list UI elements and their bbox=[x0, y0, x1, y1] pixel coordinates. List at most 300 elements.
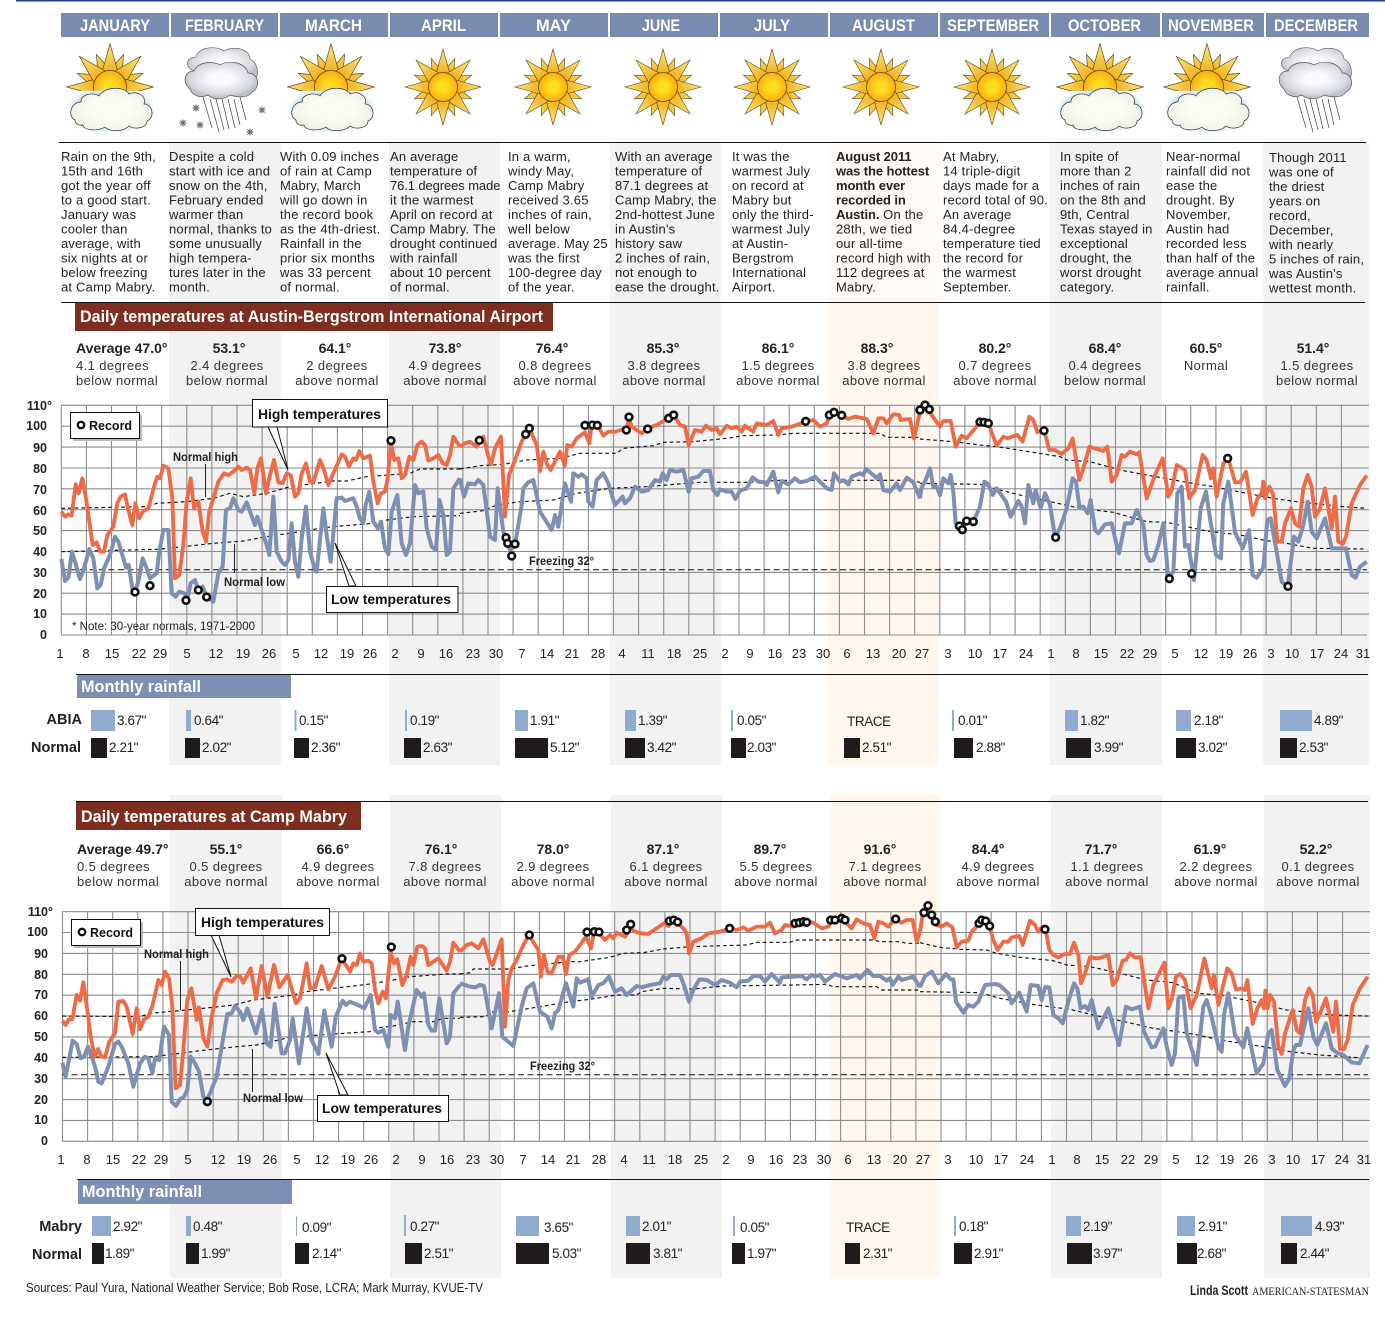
rainfall: ABIA bbox=[31, 675, 1344, 758]
rainfall: Mabry: 2.44" bbox=[1300, 1246, 1330, 1261]
x axis labels: 14 bbox=[540, 646, 554, 661]
April text: about 10 percent bbox=[390, 265, 491, 280]
x axis labels: 14 bbox=[541, 1152, 555, 1167]
month headers: DECEMBER bbox=[1274, 16, 1358, 35]
monthly averages: 0.8 degrees bbox=[518, 358, 592, 373]
June text: temperature of bbox=[615, 164, 703, 178]
x axis labels: 12 bbox=[1195, 1152, 1209, 1167]
June text: Camp Mabry, the bbox=[615, 192, 717, 208]
x axis labels: 16 bbox=[768, 646, 782, 661]
x axis labels: 16 bbox=[440, 1152, 454, 1167]
x axis labels: 9 bbox=[746, 646, 754, 661]
x axis labels: 23 bbox=[466, 1152, 480, 1167]
rainfall: Mabry: 2.14" bbox=[312, 1246, 342, 1261]
x axis labels: 10 bbox=[1285, 646, 1299, 661]
monthly averages: 84.4° bbox=[972, 841, 1004, 857]
icon: August sun bbox=[843, 49, 919, 125]
monthly averages: Average 49.7° bbox=[77, 841, 168, 857]
December text: years on bbox=[1269, 194, 1320, 208]
monthly averages: above normal bbox=[842, 373, 926, 388]
November text: November, bbox=[1166, 207, 1231, 222]
x axis labels: 28 bbox=[591, 646, 605, 661]
rainfall: ABIA: 3.02" bbox=[1198, 740, 1228, 755]
rainfall: ABIA: TRACE bbox=[847, 714, 891, 729]
December text: 5 inches of rain, bbox=[1269, 252, 1364, 266]
x axis labels: 24 bbox=[1334, 646, 1348, 661]
monthly averages: 1.1 degrees bbox=[1070, 859, 1144, 874]
December text: was one of bbox=[1268, 164, 1334, 180]
icon: June sun bbox=[625, 49, 701, 125]
x axis labels: 8 bbox=[1073, 1152, 1081, 1167]
January text: six nights at or bbox=[61, 250, 148, 266]
monthly averages: above normal bbox=[956, 874, 1040, 889]
monthly averages: below normal bbox=[186, 373, 268, 388]
y axis labels: 110° bbox=[27, 399, 52, 413]
rainfall: Mabry: 3.97" bbox=[1093, 1246, 1123, 1261]
x axis labels: 17 bbox=[1310, 646, 1324, 661]
label: normal high: Normal high bbox=[173, 452, 238, 464]
month shading bands bbox=[169, 143, 1370, 1278]
August text: recorded in bbox=[836, 192, 906, 208]
y axis labels: 10 bbox=[33, 607, 47, 621]
x axis labels: 25 bbox=[693, 646, 707, 661]
June text: not enough to bbox=[615, 265, 697, 280]
x axis labels: 6 bbox=[843, 646, 851, 661]
monthly averages: 85.3° bbox=[647, 340, 679, 356]
rainfall: ABIA: 5.12" bbox=[550, 740, 580, 755]
monthly averages: 68.4° bbox=[1089, 340, 1121, 356]
month headers: SEPTEMBER bbox=[947, 16, 1039, 35]
June text: 2nd-hottest June bbox=[615, 207, 715, 222]
y axis labels: 0 bbox=[41, 1134, 48, 1148]
label: freezing: Freezing 32° bbox=[530, 1061, 595, 1073]
rainfall: Mabry: 1.97" bbox=[747, 1246, 777, 1261]
January text: January was bbox=[61, 207, 136, 222]
monthly averages: below normal bbox=[1064, 373, 1146, 388]
monthly averages: above normal bbox=[734, 874, 818, 889]
x axis labels: 19 bbox=[341, 1152, 355, 1167]
February text: some unusually bbox=[169, 236, 262, 251]
May text: average. May 25 bbox=[508, 236, 608, 251]
monthly averages: 80.2° bbox=[979, 340, 1011, 356]
callout: low temperatures: Low temperatures bbox=[322, 1101, 442, 1116]
monthly averages: 2.2 degrees bbox=[1179, 859, 1253, 874]
monthly averages: above normal bbox=[843, 874, 927, 889]
x axis labels: 12 bbox=[209, 646, 223, 661]
monthly averages: Normal bbox=[1184, 358, 1228, 373]
monthly averages: 78.0° bbox=[537, 841, 569, 857]
month headers: MARCH bbox=[305, 16, 362, 35]
x axis labels: 17 bbox=[994, 1152, 1008, 1167]
x axis labels: 3 bbox=[1268, 1152, 1276, 1167]
November text: recorded less bbox=[1166, 236, 1247, 251]
icon: July sun bbox=[734, 49, 810, 125]
icon: February snow cloud bbox=[180, 48, 266, 136]
label: normal low bbox=[243, 1049, 303, 1105]
monthly averages: 73.8° bbox=[429, 340, 461, 356]
February text: snow on the 4th, bbox=[169, 178, 268, 193]
x axis labels: 3 bbox=[944, 646, 952, 661]
rainfall: Mabry: 2.19" bbox=[1083, 1219, 1113, 1234]
y axis labels: 40 bbox=[34, 1051, 48, 1065]
July text: International bbox=[732, 265, 806, 280]
monthly averages: 61.9° bbox=[1194, 841, 1226, 857]
x axis labels: 24 bbox=[1019, 646, 1033, 661]
monthly averages: above normal bbox=[1276, 874, 1360, 889]
monthly averages: 76.4° bbox=[536, 340, 568, 356]
month headers: JULY bbox=[754, 16, 791, 35]
monthly averages: 3.8 degrees bbox=[847, 358, 921, 373]
April text: with rainfall bbox=[389, 250, 458, 266]
monthly averages: 7.8 degrees bbox=[408, 859, 482, 874]
May text: well below bbox=[507, 222, 570, 236]
monthly averages: 0.4 degrees bbox=[1068, 358, 1142, 373]
heading: monthly rainfall: Monthly rainfall bbox=[81, 677, 201, 696]
x axis labels: 24 bbox=[1020, 1152, 1034, 1167]
monthly averages: 87.1° bbox=[647, 841, 679, 857]
series middle third bbox=[460, 915, 920, 1046]
September text: the warmest bbox=[943, 265, 1016, 280]
x axis labels: 16 bbox=[439, 646, 453, 661]
August text: record high with bbox=[836, 250, 931, 266]
x axis labels: 29 bbox=[1144, 1152, 1158, 1167]
heading: Austin-Bergstrom bbox=[75, 303, 553, 331]
label: normal low: Normal low bbox=[224, 577, 285, 589]
June text: 87.1 degrees at bbox=[615, 178, 709, 193]
y axis labels: 30 bbox=[33, 566, 47, 580]
y axis labels: 90 bbox=[34, 947, 48, 961]
July text: Bergstrom bbox=[732, 250, 794, 266]
monthly averages: 89.7° bbox=[754, 841, 786, 857]
February text: Despite a cold bbox=[169, 149, 254, 164]
x axis labels: 29 bbox=[154, 1152, 168, 1167]
rainfall: Mabry: 0.18" bbox=[959, 1219, 989, 1234]
rainfall: Mabry: 0.09" bbox=[302, 1220, 332, 1235]
November text: rainfall did not bbox=[1166, 164, 1250, 178]
December text: record, bbox=[1269, 208, 1311, 223]
December text: with nearly bbox=[1268, 237, 1334, 252]
March text: the record book bbox=[280, 207, 374, 222]
x axis labels: 3 bbox=[1267, 646, 1275, 661]
x axis labels: 23 bbox=[792, 646, 806, 661]
rainfall: ABIA: 0.15" bbox=[299, 713, 329, 728]
January text: at Camp Mabry. bbox=[61, 280, 155, 294]
May text: inches of rain, bbox=[508, 207, 592, 222]
monthly averages: 7.1 degrees bbox=[848, 859, 922, 874]
September text: record total of 90. bbox=[943, 192, 1048, 208]
rainfall: ABIA: 2.02" bbox=[202, 740, 232, 755]
monthly averages: 52.2° bbox=[1300, 841, 1332, 857]
x axis labels: 17 bbox=[993, 646, 1007, 661]
x axis labels: 30 bbox=[490, 1152, 504, 1167]
August text: 112 degrees at bbox=[836, 265, 925, 280]
monthly averages bbox=[76, 340, 1358, 388]
x axis labels: 27 bbox=[916, 1152, 930, 1167]
monthly averages: below normal bbox=[76, 373, 158, 388]
x axis labels: 9 bbox=[418, 1152, 426, 1167]
monthly averages: 1.5 degrees bbox=[1280, 358, 1354, 373]
x axis labels: 30 bbox=[489, 646, 503, 661]
heading: Camp Mabry bbox=[76, 802, 361, 830]
January text: got the year off bbox=[61, 178, 151, 193]
rainfall: ABIA: 1.39" bbox=[638, 713, 668, 728]
x axis labels: 21 bbox=[565, 646, 579, 661]
x axis labels: 12 bbox=[1194, 646, 1208, 661]
May text: of the year. bbox=[508, 280, 575, 294]
x axis labels: 22 bbox=[132, 646, 146, 661]
series right third bbox=[917, 402, 1367, 590]
credit: Linda Scott bbox=[1190, 1282, 1248, 1298]
rainfall: ABIA: 3.67" bbox=[117, 713, 147, 728]
July text: Mabry but bbox=[732, 192, 792, 208]
October text: exceptional bbox=[1060, 236, 1128, 251]
label: normal high bbox=[173, 452, 238, 497]
April text: of normal. bbox=[390, 280, 450, 294]
x axis labels: 1 bbox=[56, 646, 64, 661]
x axis labels: 15 bbox=[105, 646, 119, 661]
January text: cooler than bbox=[61, 222, 128, 236]
x axis labels: 22 bbox=[132, 1152, 146, 1167]
monthly averages: above normal bbox=[624, 874, 708, 889]
credit bbox=[1190, 1282, 1369, 1298]
April text: Camp Mabry. The bbox=[390, 222, 496, 236]
x axis labels: 24 bbox=[1335, 1152, 1349, 1167]
December text: December, bbox=[1269, 222, 1334, 238]
x axis labels: 19 bbox=[1219, 646, 1233, 661]
February text: warmer than bbox=[168, 207, 243, 222]
y axis labels: 50 bbox=[34, 1030, 48, 1044]
y axis labels: 80 bbox=[33, 462, 47, 476]
label: normal high: Normal high bbox=[144, 949, 209, 961]
y axis labels: 20 bbox=[34, 1093, 48, 1107]
x axis labels: 2 bbox=[392, 1152, 400, 1167]
rainfall: Mabry: 4.93" bbox=[1315, 1219, 1345, 1234]
x axis labels: 26 bbox=[1243, 646, 1257, 661]
legend: record bbox=[70, 412, 142, 441]
monthly averages: 2 degrees bbox=[306, 358, 368, 373]
y axis labels: 70 bbox=[34, 988, 48, 1002]
x axis labels: 26 bbox=[1244, 1152, 1258, 1167]
April text: it the warmest bbox=[390, 192, 474, 208]
x axis labels: 18 bbox=[667, 646, 681, 661]
August text: 28th, we tied bbox=[836, 222, 912, 236]
rainfall: Mabry: 0.05" bbox=[740, 1220, 770, 1235]
x axis labels: 5 bbox=[184, 1152, 192, 1167]
x axis labels: 18 bbox=[668, 1152, 682, 1167]
x axis labels: 31 bbox=[1357, 1152, 1371, 1167]
monthly averages: 0.5 degrees bbox=[189, 859, 263, 874]
August text: August 2011 bbox=[836, 149, 912, 164]
y axis labels bbox=[27, 905, 53, 1148]
x axis labels: 26 bbox=[363, 646, 377, 661]
icon: March partly sunny bbox=[288, 44, 374, 131]
heading: monthly rainfall bbox=[77, 675, 291, 698]
callout: high temperatures bbox=[252, 400, 388, 470]
freezing line bbox=[61, 569, 1367, 571]
June text: 2 inches of rain, bbox=[615, 250, 710, 266]
x axis labels: 5 bbox=[1171, 646, 1179, 661]
November text: than half of the bbox=[1166, 250, 1255, 266]
x axis labels: 10 bbox=[969, 1152, 983, 1167]
x axis labels: 25 bbox=[694, 1152, 708, 1167]
May text: 100-degree day bbox=[508, 265, 602, 280]
y axis labels: 80 bbox=[34, 968, 48, 982]
December text: Though 2011 bbox=[1269, 150, 1347, 165]
x axis labels: 5 bbox=[1172, 1152, 1180, 1167]
March text: will go down in bbox=[279, 192, 368, 208]
October text: more than 2 bbox=[1060, 164, 1132, 178]
line chart: Camp Mabry bbox=[27, 902, 1371, 1167]
note: * Note: 30-year normals, 1971-2000 bbox=[72, 619, 255, 633]
y axis labels: 50 bbox=[33, 524, 47, 538]
callout: low temperatures: Low temperatures bbox=[331, 592, 451, 607]
September text: 84.4-degree bbox=[943, 222, 1015, 236]
August text: Austin. On the bbox=[836, 207, 923, 222]
monthly averages: 0.5 degrees bbox=[77, 859, 150, 874]
x axis labels: 21 bbox=[566, 1152, 580, 1167]
y axis labels: 70 bbox=[33, 483, 47, 497]
monthly averages: above normal bbox=[1065, 874, 1149, 889]
rainfall: Mabry: 5.03" bbox=[552, 1246, 582, 1261]
rainfall: ABIA: Normal bbox=[31, 740, 81, 756]
x axis labels: 5 bbox=[293, 1152, 301, 1167]
x axis labels: 11 bbox=[641, 646, 655, 661]
rainfall: Mabry: 2.31" bbox=[863, 1246, 893, 1261]
monthly averages: 4.1 degrees bbox=[76, 358, 149, 373]
July text: at Austin- bbox=[732, 236, 788, 251]
July text: warmest July bbox=[731, 164, 811, 178]
October text: inches of rain bbox=[1060, 178, 1140, 193]
y axis labels: 40 bbox=[33, 545, 47, 559]
icon: September sun bbox=[954, 49, 1030, 125]
monthly averages: above normal bbox=[403, 373, 487, 388]
rainfall: ABIA: 2.63" bbox=[423, 740, 453, 755]
x axis labels: 13 bbox=[866, 646, 880, 661]
x axis labels: 1 bbox=[1047, 646, 1055, 661]
rainfall: ABIA: 3.99" bbox=[1094, 740, 1124, 755]
rainfall: Mabry: 0.48" bbox=[193, 1219, 223, 1234]
x axis labels: 28 bbox=[592, 1152, 606, 1167]
October text: Texas stayed in bbox=[1060, 222, 1153, 236]
callout: high temperatures: High temperatures bbox=[201, 915, 324, 930]
July text: only the third- bbox=[732, 207, 814, 222]
May text: In a warm, bbox=[508, 149, 571, 164]
monthly averages: 91.6° bbox=[864, 841, 896, 857]
x axis labels: 10 bbox=[1286, 1152, 1300, 1167]
monthly averages: 76.1° bbox=[425, 841, 457, 857]
August text: month ever bbox=[836, 178, 905, 193]
monthly averages: Average 47.0° bbox=[76, 340, 167, 356]
monthly averages: 66.6° bbox=[317, 841, 349, 857]
y axis labels: 20 bbox=[33, 587, 47, 601]
November text: rainfall. bbox=[1166, 280, 1210, 294]
legend: record bbox=[72, 920, 143, 948]
x axis labels: 12 bbox=[314, 646, 328, 661]
October text: category. bbox=[1060, 280, 1114, 294]
rainfall: Mabry: 2.91" bbox=[1198, 1219, 1228, 1234]
x axis labels: 11 bbox=[642, 1152, 656, 1167]
month headers: OCTOBER bbox=[1068, 16, 1141, 35]
y axis labels: 90 bbox=[33, 441, 47, 455]
February text: February ended bbox=[169, 192, 264, 208]
April text: temperature of bbox=[390, 164, 478, 178]
rainfall: ABIA: 4.89" bbox=[1314, 713, 1344, 728]
rainfall: ABIA: 0.64" bbox=[194, 713, 224, 728]
monthly averages: 64.1° bbox=[319, 340, 351, 356]
February text: high tempera- bbox=[169, 250, 252, 266]
legend: record: Record bbox=[89, 419, 132, 433]
monthly averages: above normal bbox=[295, 373, 379, 388]
line chart: Austin-Bergstrom bbox=[26, 399, 1370, 661]
rainfall: ABIA: 2.36" bbox=[311, 740, 341, 755]
January text: to a good start. bbox=[61, 192, 151, 208]
y axis labels: 0 bbox=[40, 628, 47, 642]
x axis labels: 26 bbox=[364, 1152, 378, 1167]
March text: Rainfall in the bbox=[280, 236, 362, 251]
September text: An average bbox=[943, 207, 1012, 222]
icon: November partly sunny bbox=[1164, 44, 1250, 131]
August text: was the hottest bbox=[835, 164, 930, 178]
September text: At Mabry, bbox=[943, 149, 999, 164]
October text: on the 8th and bbox=[1060, 192, 1146, 208]
y axis labels: 60 bbox=[33, 504, 47, 518]
legend: record: Record bbox=[90, 926, 133, 940]
x axis labels: 30 bbox=[816, 646, 830, 661]
March text: was 33 percent bbox=[279, 265, 371, 280]
monthly averages: above normal bbox=[953, 373, 1037, 388]
y axis labels: 100 bbox=[27, 925, 48, 939]
month headers: APRIL bbox=[421, 16, 466, 35]
rainfall: ABIA: 2.21" bbox=[109, 740, 139, 755]
May text: Camp Mabry bbox=[508, 178, 585, 193]
monthly averages: 3.8 degrees bbox=[627, 358, 701, 373]
monthly averages: 60.5° bbox=[1190, 340, 1222, 356]
rainfall: Mabry: 2.92" bbox=[113, 1219, 143, 1234]
icon: December rain cloud bbox=[1279, 48, 1352, 132]
series middle third bbox=[460, 407, 923, 559]
x axis labels: 13 bbox=[867, 1152, 881, 1167]
monthly averages: above normal bbox=[513, 373, 597, 388]
monthly averages: 53.1° bbox=[213, 340, 245, 356]
March text: Mabry, March bbox=[280, 178, 361, 193]
monthly averages: above normal bbox=[184, 874, 268, 889]
May text: windy May, bbox=[507, 164, 574, 178]
month headers: FEBRUARY bbox=[185, 16, 265, 35]
x axis labels: 4 bbox=[620, 1152, 628, 1167]
callout: high temperatures: High temperatures bbox=[258, 407, 381, 422]
x axis labels: 16 bbox=[769, 1152, 783, 1167]
monthly averages: 86.1° bbox=[762, 340, 794, 356]
x axis labels: 26 bbox=[263, 1152, 277, 1167]
rainfall: Mabry: 3.65" bbox=[544, 1220, 574, 1235]
monthly averages: 4.9 degrees bbox=[961, 859, 1035, 874]
icon: October partly sunny bbox=[1057, 44, 1143, 131]
x axis labels: 15 bbox=[106, 1152, 120, 1167]
series left third bbox=[61, 437, 460, 604]
July text: It was the bbox=[732, 149, 790, 164]
October text: drought, the bbox=[1060, 250, 1132, 266]
rainfall: ABIA: 2.18" bbox=[1194, 713, 1224, 728]
month headers: JUNE bbox=[642, 16, 680, 35]
September text: temperature tied bbox=[943, 236, 1041, 251]
callout: high temperatures bbox=[196, 908, 330, 977]
y axis labels: 110° bbox=[28, 905, 53, 919]
x axis labels: 29 bbox=[153, 646, 167, 661]
April text: drought continued bbox=[390, 236, 497, 251]
label: normal low: Normal low bbox=[243, 1093, 303, 1105]
x axis labels: 3 bbox=[944, 1152, 952, 1167]
x axis labels: 29 bbox=[1143, 646, 1157, 661]
